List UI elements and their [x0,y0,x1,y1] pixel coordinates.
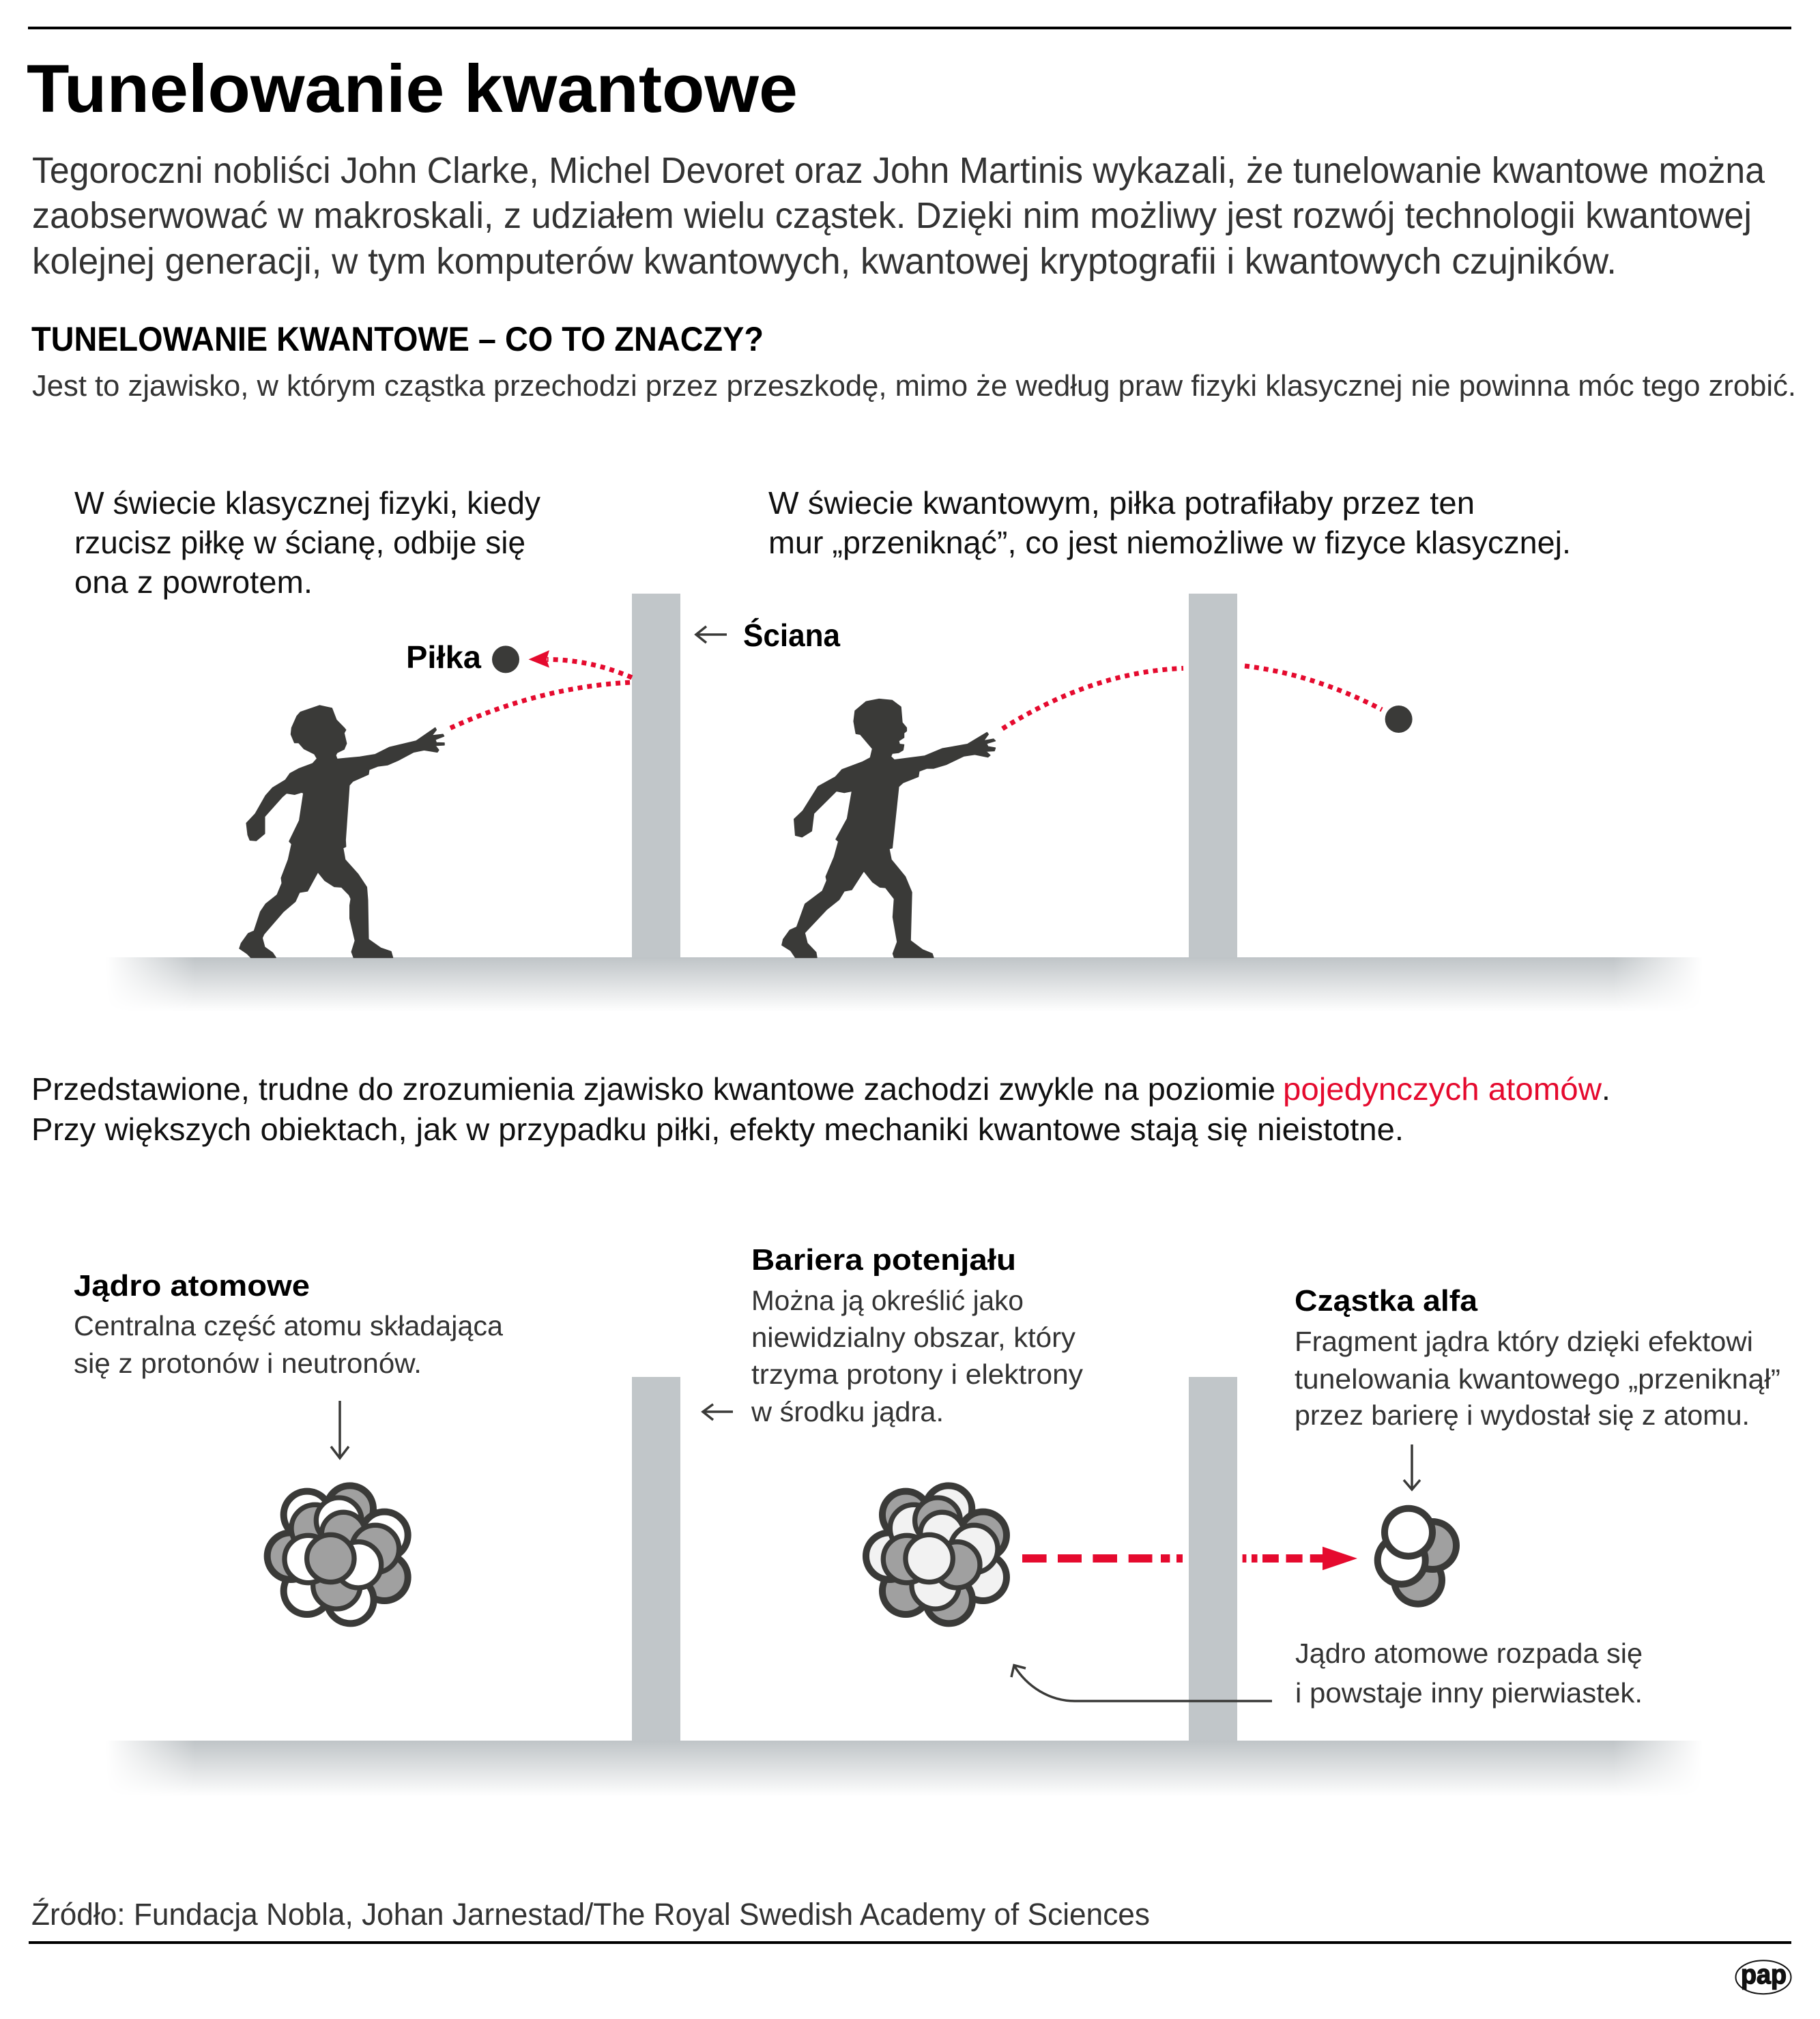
text: potential barrier: trzyma protony i elektrony [751,1359,1084,1390]
red throw arc to wall [450,682,631,728]
text: alpha particle: Cząstka alfa [1295,1284,1478,1318]
text: alpha particle: tunelowania kwantowego „przeniknął” [1295,1363,1780,1395]
section heading: TUNELOWANIE KWANTOWE – CO TO ZNACZY? [31,320,764,358]
arrow down to alpha particle [1404,1444,1420,1490]
source: Źródło: Fundacja Nobla, Johan Jarnestad/The Royal Swedish Academy of Sciences [31,1897,1150,1932]
curved arrow to nucleus [1011,1665,1272,1701]
ball left [492,645,519,673]
text: classical physics: ona z powrotem. [74,564,313,600]
red arc after wall [1245,666,1382,710]
red bounce arrow [528,650,632,678]
text: potential barrier: niewidzialny obszar, który [751,1322,1076,1353]
text: nucleus [74,1269,503,1379]
intro paragraph [32,150,1765,282]
panel: ball and wall scene [106,594,1703,1012]
text: decay: Jądro atomowe rozpada się [1295,1638,1643,1669]
explanatory text: Przedstawione, trudne do zrozumienia zjawisko kwantowe zachodzi zwykle na poziomie [31,1071,1275,1107]
section definition: Jest to zjawisko, w którym cząstka przechodzi przez przeszkodę, mimo że według praw fizyki klasycznej nie powinna móc tego zrobić. [32,369,1796,403]
panel: atomic nucleus scene [74,1243,1780,1797]
text: nucleus: Jądro atomowe [74,1269,310,1303]
title: Tunelowanie kwantowe [27,50,798,126]
ground shadow [117,1741,1691,1789]
arrow down to nucleus [331,1401,349,1458]
red arc before wall [1002,668,1183,729]
explanatory text: . [1602,1071,1610,1107]
silhouette: child quantum [782,699,995,957]
explanatory text [31,1071,1610,1147]
silhouette: child classical [240,706,444,957]
intro paragraph: Tegoroczni nobliści John Clarke, Michel Devoret oraz John Martinis wykazali, że tunelowanie kwantowe można [32,150,1765,191]
label: ball: Piłka [406,639,481,675]
text: decay: i powstaje inny pierwiastek. [1295,1677,1643,1709]
text: nucleus: się z protonów i neutronów. [74,1348,422,1379]
text: quantum world [768,485,1571,560]
text: potential barrier: Można ją określić jako [751,1285,1024,1316]
red dashed arrow through barrier [1022,1547,1357,1570]
text: classical physics: W świecie klasycznej fizyki, kiedy [74,485,540,521]
explanatory text: pojedynczych atomów [1283,1071,1602,1107]
atom: nucleus [268,1485,408,1623]
text: potential barrier: w środku jądra. [751,1396,944,1427]
text: quantum world: W świecie kwantowym, piłka potrafiłaby przez ten [768,485,1475,521]
label: wall: Ściana [743,618,840,653]
intro paragraph: kolejnej generacji, w tym komputerów kwantowych, kwantowej kryptografii i kwantowych czujników. [32,241,1617,282]
intro paragraph: zaobserwować w makroskali, z udziałem wielu cząstek. Dzięki nim możliwy jest rozwój technologii kwantowej [32,195,1752,236]
text: alpha particle [1295,1284,1780,1431]
text: nucleus: Centralna część atomu składająca [74,1310,503,1341]
barrier left [632,1377,680,1741]
explanatory text: Przy większych obiektach, jak w przypadku piłki, efekty mechaniki kwantowe stają się nieistotne. [31,1112,1404,1147]
arrow to wall [696,626,727,643]
wall right [1189,594,1237,957]
ground shadow [117,957,1691,1004]
atom: alpha particle [1378,1509,1456,1604]
text: potential barrier: Bariera potenjału [751,1243,1016,1277]
text: alpha particle: Fragment jądra który dzięki efektowi [1295,1326,1753,1357]
text: alpha particle: przez barierę i wydostał się z atomu. [1295,1399,1750,1431]
arrow to barrier [703,1404,733,1420]
text: classical physics [74,485,540,600]
text: quantum world: mur „przeniknąć”, co jest niemożliwe w fizyce klasycznej. [768,525,1571,560]
wall left [632,594,680,957]
ball right [1385,706,1413,733]
text: classical physics: rzucisz piłkę w ścianę, odbije się [74,525,525,560]
text: potential barrier [751,1243,1084,1427]
barrier right [1189,1377,1237,1741]
logo: pap: pap [1741,1960,1787,1990]
text: decay [1295,1638,1643,1709]
atom: decaying nucleus [866,1485,1007,1623]
